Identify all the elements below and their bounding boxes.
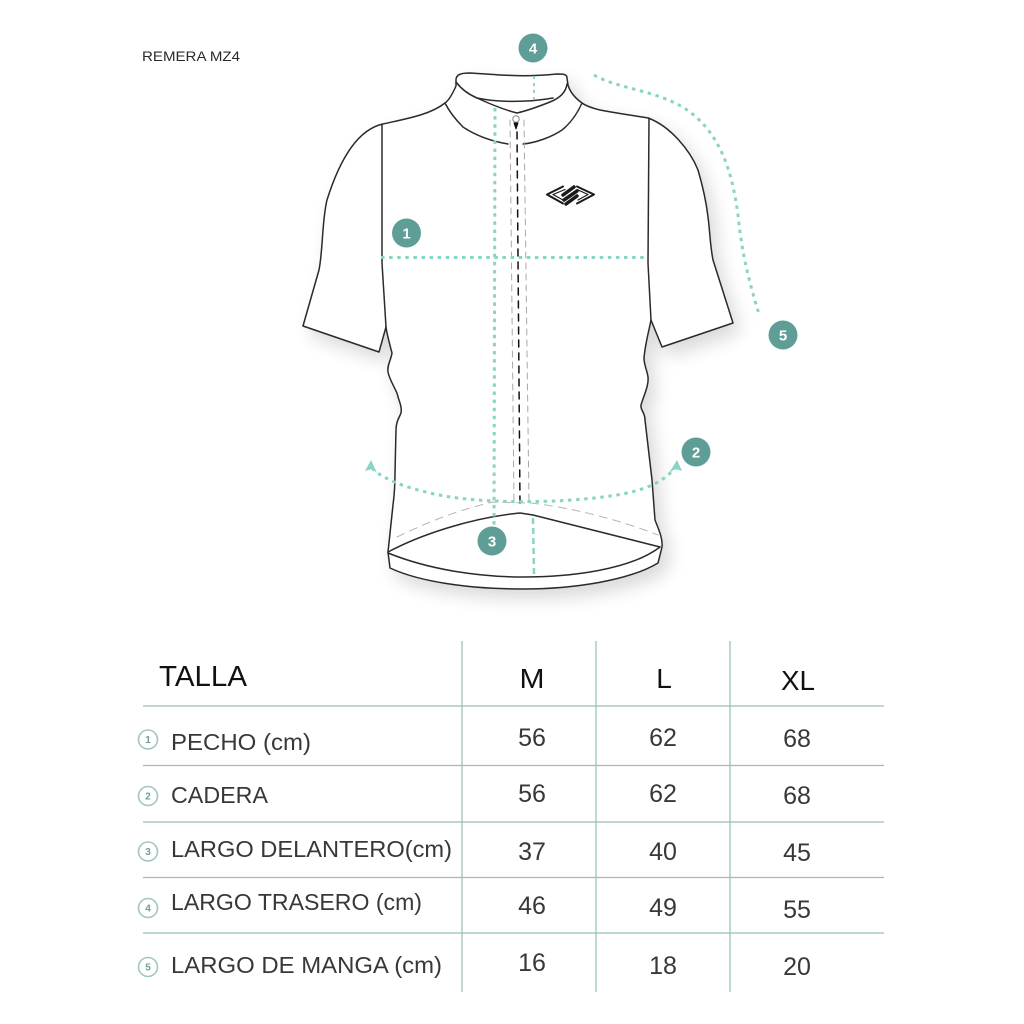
marker 1: 1 bbox=[402, 226, 411, 242]
right sleeve seam bbox=[648, 118, 651, 320]
column XL values: 45 bbox=[783, 839, 811, 867]
column M values: 46 bbox=[518, 892, 546, 920]
row numbers: 2 bbox=[145, 792, 151, 802]
column L values: 40 bbox=[649, 838, 677, 866]
table header bbox=[159, 661, 815, 696]
row labels: PECHO (cm) bbox=[171, 729, 311, 755]
jersey illustration bbox=[303, 73, 733, 589]
column L values: 18 bbox=[649, 952, 677, 980]
marker 3: 3 bbox=[488, 534, 496, 550]
row number icons bbox=[138, 730, 158, 976]
marker 5 bbox=[768, 320, 798, 350]
arrowhead left bbox=[365, 460, 377, 473]
column M values bbox=[518, 724, 546, 977]
table grid bbox=[143, 641, 884, 992]
column M values: 56 bbox=[518, 780, 546, 808]
measure 4: back length top bbox=[533, 76, 535, 100]
marker 4: 4 bbox=[529, 40, 538, 58]
table header: L bbox=[656, 663, 672, 694]
column L values bbox=[649, 724, 677, 980]
row labels: LARGO DELANTERO(cm) bbox=[171, 836, 452, 862]
row labels bbox=[171, 729, 452, 978]
marker 2 bbox=[682, 438, 710, 466]
marker 3 bbox=[478, 526, 506, 556]
hem stitching dashes bbox=[397, 502, 658, 537]
row numbers: 1 bbox=[145, 735, 151, 746]
collar base right bbox=[523, 103, 582, 144]
table header: XL bbox=[781, 665, 815, 696]
zipper pull bbox=[513, 116, 519, 129]
column L values: 62 bbox=[649, 780, 677, 808]
measure 1: chest line bbox=[381, 256, 648, 259]
column XL values: 20 bbox=[783, 953, 811, 981]
column L values: 49 bbox=[649, 894, 677, 922]
row numbers: 5 bbox=[145, 962, 151, 974]
collar base left bbox=[445, 103, 508, 144]
column M values: 56 bbox=[518, 724, 546, 752]
left sleeve seam bbox=[382, 124, 386, 327]
column XL values: 68 bbox=[783, 782, 811, 810]
collar opening bbox=[456, 82, 567, 113]
lower hem bbox=[388, 547, 660, 577]
inner back collar bbox=[477, 98, 553, 101]
marker 2: 2 bbox=[692, 444, 700, 462]
row labels: LARGO DE MANGA (cm) bbox=[171, 952, 442, 978]
measure 2: hip arc bbox=[372, 468, 675, 502]
marker 5: 5 bbox=[779, 328, 787, 344]
icon: chest logo bbox=[547, 186, 594, 204]
table header: TALLA bbox=[159, 661, 248, 693]
row labels: CADERA bbox=[171, 782, 269, 808]
size table bbox=[138, 641, 884, 992]
column M values: 37 bbox=[518, 838, 546, 866]
column XL values: 68 bbox=[783, 725, 811, 753]
measure lines bbox=[372, 75, 759, 574]
row numbers bbox=[145, 735, 151, 974]
product title: REMERA MZ4 bbox=[142, 48, 240, 64]
marker 4 bbox=[518, 34, 548, 62]
row numbers: 4 bbox=[145, 904, 151, 914]
jersey outline bbox=[303, 73, 733, 589]
measure 3: front length bbox=[494, 108, 495, 528]
measure 5: sleeve length bbox=[594, 75, 759, 314]
zipper placket dashes bbox=[510, 120, 529, 503]
column XL values: 55 bbox=[783, 896, 811, 924]
arrowhead right bbox=[669, 460, 682, 473]
marker 1 bbox=[392, 218, 421, 248]
column L values: 62 bbox=[649, 724, 677, 752]
zipper bbox=[517, 132, 520, 505]
column M values: 16 bbox=[518, 949, 546, 977]
row labels: LARGO TRASERO (cm) bbox=[171, 889, 422, 915]
column XL values bbox=[783, 725, 811, 981]
front hem bbox=[388, 513, 660, 552]
row numbers: 3 bbox=[145, 847, 151, 858]
measure 4: back length bottom bbox=[533, 518, 534, 574]
table header: M bbox=[520, 663, 544, 694]
